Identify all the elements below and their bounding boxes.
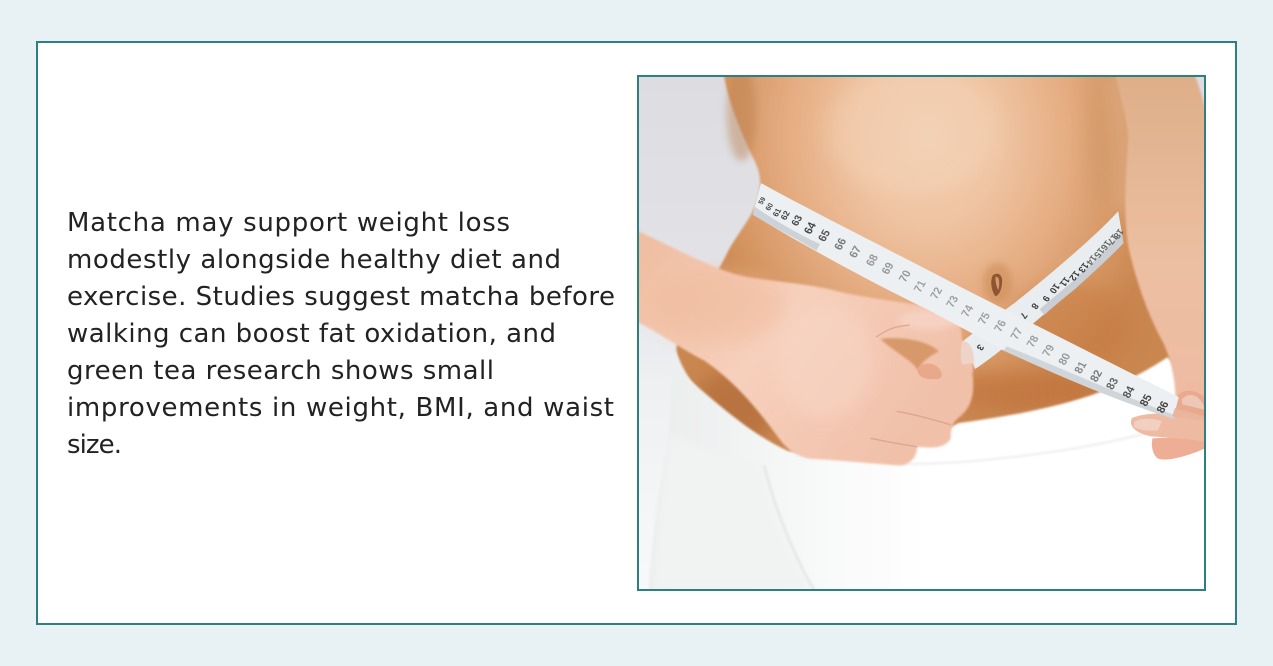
- main measuring tape strip: 82: [1088, 368, 1105, 384]
- main measuring tape strip: 62: [778, 209, 792, 221]
- body text block: [67, 208, 615, 460]
- second measuring tape strip: [964, 211, 1126, 369]
- second measuring tape strip: 9: [1040, 294, 1052, 303]
- main measuring tape strip: 74: [959, 303, 977, 319]
- main measuring tape strip: 67: [847, 244, 864, 260]
- main measuring tape strip: 66: [832, 237, 849, 252]
- second measuring tape strip: 7: [1018, 311, 1029, 320]
- main measuring tape strip: 85: [1138, 393, 1155, 408]
- main measuring tape strip: 72: [928, 286, 945, 301]
- white towel: [648, 347, 1212, 597]
- main measuring tape strip: 63: [790, 213, 806, 228]
- second measuring tape strip: 4: [986, 336, 998, 346]
- second measuring tape strip: 15: [1092, 246, 1106, 259]
- thumb pinching tape end: [1172, 408, 1204, 417]
- main measuring tape strip: 73: [944, 294, 961, 310]
- main measuring tape strip: 65: [816, 228, 833, 244]
- photo backdrop: [630, 70, 1212, 597]
- body text block: modestly alongside healthy diet and: [67, 245, 561, 275]
- main measuring tape strip: 79: [1040, 343, 1057, 359]
- main measuring tape strip: 83: [1104, 376, 1121, 392]
- left forearm and hand: [633, 229, 974, 465]
- main measuring tape strip: 61: [771, 206, 784, 218]
- fingernail: [961, 340, 974, 365]
- main measuring tape strip: 70: [897, 269, 914, 284]
- second measuring tape strip: 14: [1084, 253, 1099, 268]
- body text block: exercise. Studies suggest matcha before: [67, 282, 615, 312]
- second measuring tape strip: 10: [1047, 282, 1062, 295]
- main measuring tape strip: [753, 183, 1179, 419]
- body text block: improvements in weight, BMI, and waist: [67, 393, 614, 423]
- main measuring tape strip: 75: [976, 311, 993, 327]
- body text block: size.: [67, 430, 122, 460]
- navel: [983, 263, 1012, 303]
- second measuring tape strip: 12: [1067, 269, 1082, 282]
- second measuring tape strip: 16: [1098, 239, 1113, 252]
- body text block: Matcha may support weight loss: [67, 208, 510, 238]
- thumb underside: [917, 364, 942, 379]
- body text block: walking can boost fat oxidation, and: [67, 319, 556, 349]
- main measuring tape strip: 80: [1056, 351, 1074, 367]
- second measuring tape strip: 13: [1076, 261, 1091, 274]
- second measuring tape strip: 3: [974, 343, 986, 352]
- main measuring tape strip: 60: [764, 202, 775, 212]
- body text block: green tea research shows small: [67, 356, 494, 386]
- main measuring tape strip: 71: [912, 279, 929, 294]
- gap between thumb and finger: [881, 338, 939, 371]
- main measuring tape strip: 64: [802, 220, 820, 236]
- second measuring tape strip: 18: [1111, 227, 1126, 241]
- main measuring tape strip: 77: [1009, 326, 1026, 342]
- photo panel: hands measuring waist with tape: [630, 67, 1212, 597]
- main measuring tape strip: 78: [1025, 334, 1042, 350]
- main measuring tape strip: 68: [864, 253, 881, 268]
- second measuring tape strip: 17: [1105, 232, 1120, 246]
- second measuring tape strip: 11: [1057, 275, 1072, 288]
- main measuring tape strip: 59: [758, 196, 768, 206]
- second measuring tape strip: 8: [1029, 301, 1041, 311]
- main measuring tape strip: 69: [880, 261, 897, 276]
- right arm and hand: [1104, 73, 1212, 460]
- finger crease lines: [870, 325, 951, 447]
- main measuring tape strip: 86: [1155, 399, 1172, 415]
- torso: [676, 67, 1179, 455]
- photo frame border: [638, 76, 1205, 590]
- main measuring tape strip: 76: [992, 318, 1009, 334]
- main measuring tape strip: 84: [1121, 384, 1138, 400]
- main measuring tape strip: 81: [1072, 360, 1090, 376]
